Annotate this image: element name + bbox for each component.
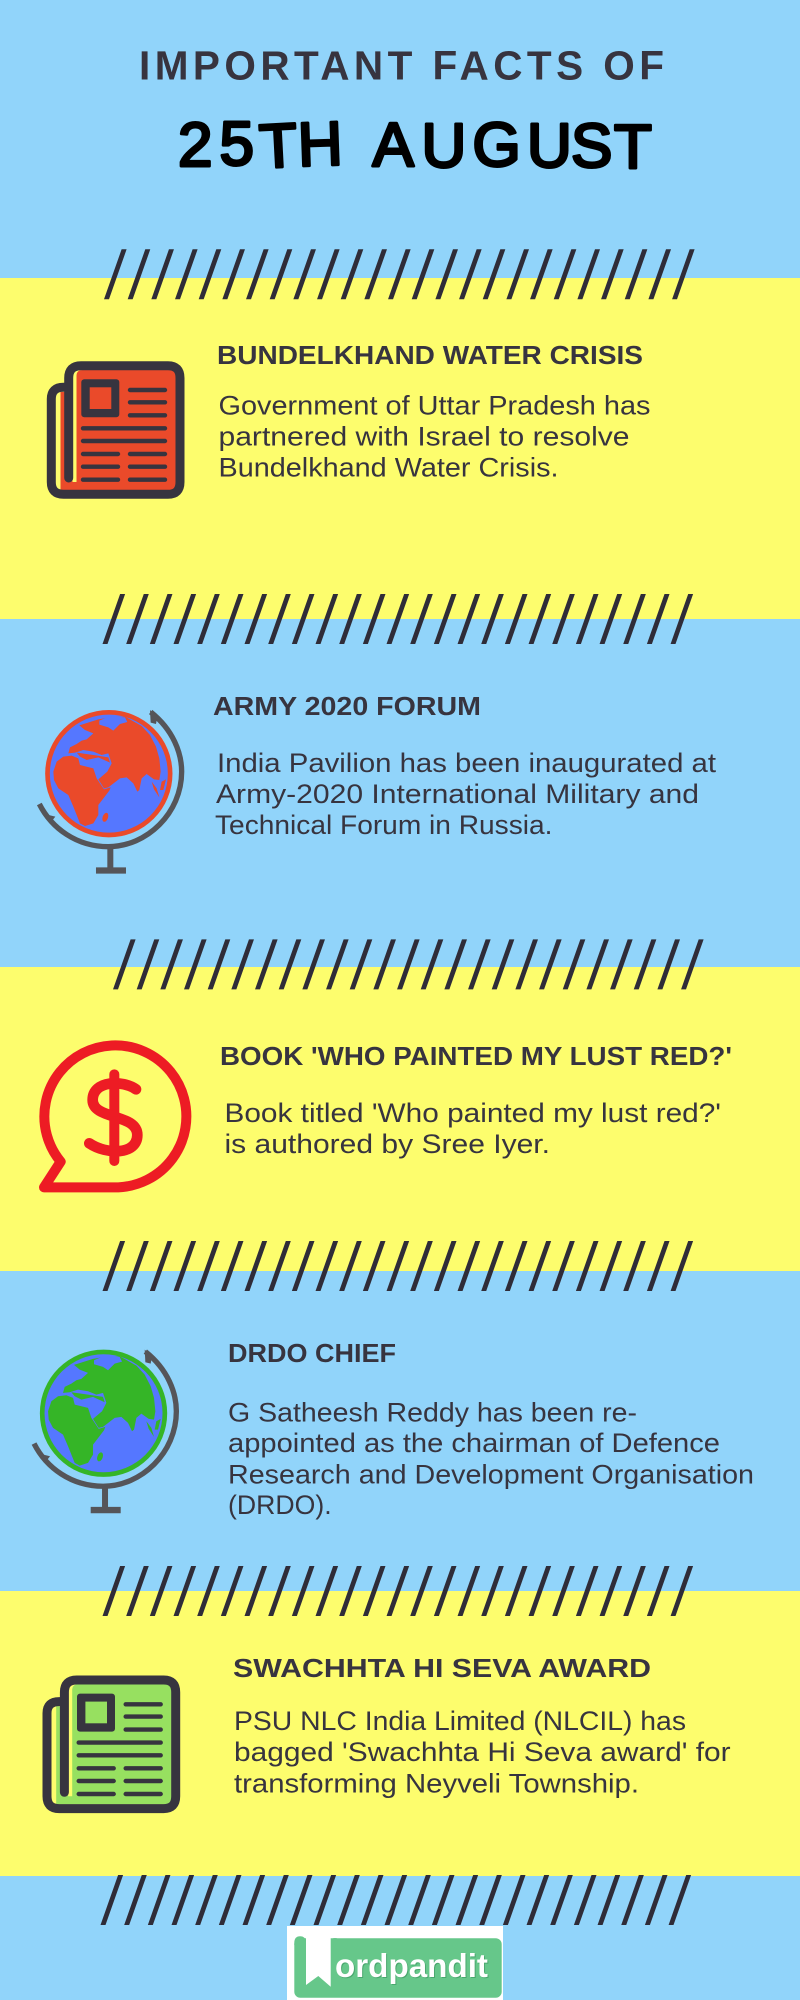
body text: G Satheesh Reddy has been re-: [228, 1397, 637, 1427]
body text: Book titled 'Who painted my lust red?': [224, 1098, 721, 1128]
heading: DRDO CHIEF: [228, 1340, 396, 1368]
heading: BUNDELKHAND WATER CRISIS: [217, 342, 643, 370]
heading: date: 25TH AUGUST: [178, 109, 652, 182]
icon: dollar speech bubble: [44, 1045, 186, 1187]
body text: bagged 'Swachhta Hi Seva award' for: [234, 1737, 731, 1767]
body text: Technical Forum in Russia.: [215, 810, 552, 840]
body text: partnered with Israel to resolve: [218, 422, 630, 452]
body text: [218, 391, 650, 483]
body text: (DRDO).: [228, 1490, 332, 1520]
panel: DRDO chief: [0, 1271, 800, 1591]
body text: appointed as the chairman of Defence: [228, 1428, 720, 1458]
body text: Research and Development Organisation: [228, 1459, 754, 1489]
logo: Wordpandit: [287, 1926, 503, 2000]
body text: PSU NLC India Limited (NLCIL) has: [234, 1706, 686, 1736]
body text: [215, 748, 717, 840]
icon: red globe: [39, 710, 182, 874]
body text: [224, 1098, 721, 1159]
body text: is authored by Sree Iyer.: [224, 1129, 550, 1159]
body text: Bundelkhand Water Crisis.: [218, 453, 558, 483]
heading: BOOK 'WHO PAINTED MY LUST RED?': [220, 1043, 732, 1071]
panel: Bundelkhand water crisis: [0, 278, 800, 619]
body text: Army-2020 International Military and: [216, 779, 699, 809]
icon: green globe: [34, 1350, 176, 1513]
body text: [228, 1397, 754, 1520]
title block: [139, 42, 664, 182]
icon: green newspaper: [47, 1680, 176, 1809]
body text: Government of Uttar Pradesh has: [218, 391, 650, 421]
heading: ARMY 2020 FORUM: [213, 693, 481, 721]
panel: Swachhta Hi Seva award: [0, 1591, 800, 1876]
body text: transforming Neyveli Township.: [234, 1768, 639, 1798]
icon: red newspaper: [51, 366, 180, 494]
heading: important facts of: IMPORTANT FACTS OF: [139, 42, 664, 88]
heading: SWACHHTA HI SEVA AWARD: [233, 1655, 651, 1683]
panel: Army 2020 forum: [0, 619, 800, 967]
body text: [234, 1706, 731, 1798]
logo: Wordpandit: ordpandit: [335, 1947, 488, 1984]
panel: book: [0, 967, 800, 1271]
body text: India Pavilion has been inaugurated at: [217, 748, 717, 778]
